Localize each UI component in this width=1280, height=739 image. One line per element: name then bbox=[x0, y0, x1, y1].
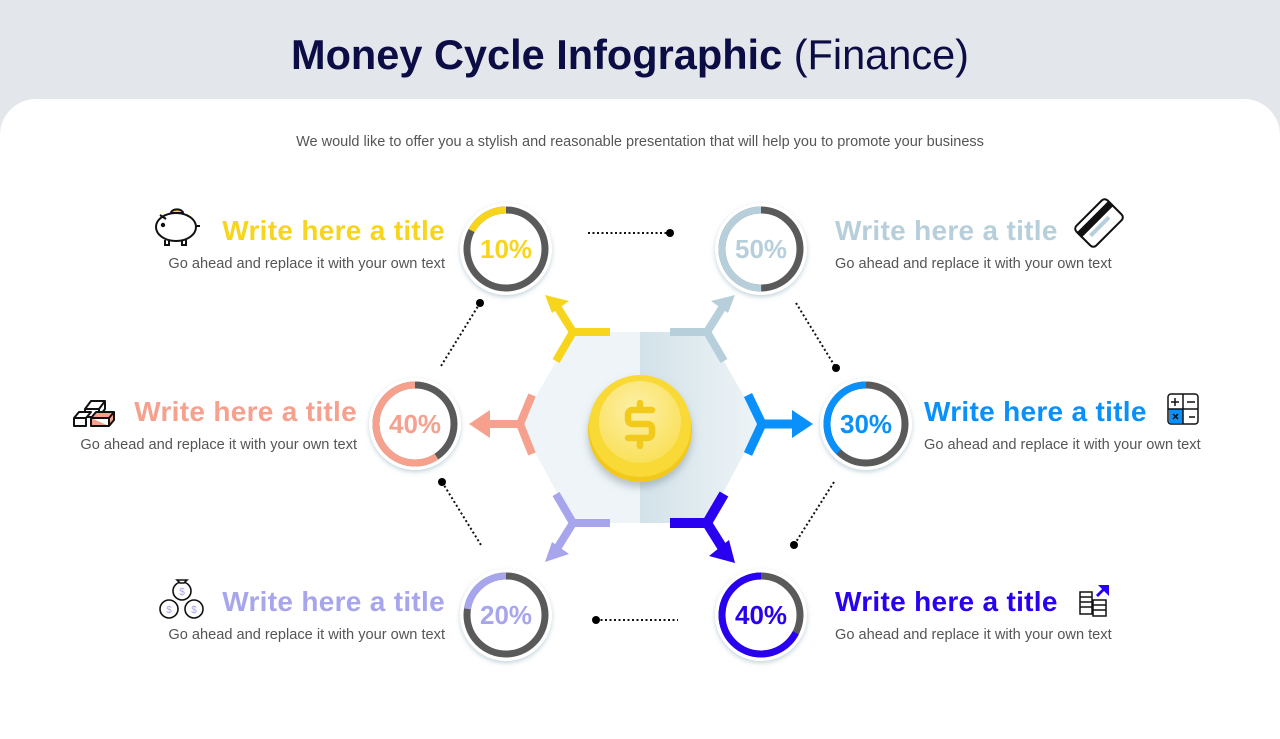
text: yellow: Go ahead and replace it with your own text bbox=[168, 256, 445, 272]
text: salmon: Write here a title bbox=[134, 396, 357, 427]
ring: 10% bbox=[460, 203, 552, 295]
icon: piggy bank bbox=[156, 209, 200, 245]
ring: 40% salmon bbox=[369, 378, 461, 470]
coin bbox=[588, 375, 692, 482]
ring: 40% salmon: 40% bbox=[389, 409, 441, 439]
text: salmon bbox=[80, 396, 357, 453]
ring: 40% dark blue bbox=[715, 569, 807, 661]
icon: card bbox=[1074, 198, 1124, 248]
ring: 30% bbox=[820, 378, 912, 470]
text: salmon: Go ahead and replace it with your own text bbox=[80, 437, 357, 453]
text: blue bbox=[924, 396, 1201, 453]
text: lavender: Go ahead and replace it with your own text bbox=[168, 627, 445, 643]
ring: 20%: 20% bbox=[480, 600, 532, 630]
text: yellow: Write here a title bbox=[222, 215, 445, 246]
dotted connectors bbox=[438, 229, 840, 624]
hexagon bbox=[520, 332, 760, 523]
text: dark blue bbox=[835, 586, 1112, 643]
text: blue: Go ahead and replace it with your own text bbox=[924, 437, 1201, 453]
arrow: salmon bbox=[469, 395, 532, 454]
text: light blue bbox=[835, 215, 1112, 272]
arrow: yellow bbox=[545, 295, 610, 361]
ring: 50% bbox=[715, 203, 807, 295]
icon: money bags: $ bbox=[166, 605, 172, 616]
arrow: lavender bbox=[545, 494, 610, 562]
ring: 40% dark blue: 40% bbox=[735, 600, 787, 630]
ring: 10%: 10% bbox=[480, 234, 532, 264]
arrow: dark blue bbox=[670, 494, 735, 563]
text: lavender: Write here a title bbox=[222, 586, 445, 617]
arrow: blue bbox=[748, 395, 813, 454]
title: Money Cycle Infographic (Finance) bbox=[291, 31, 969, 78]
icon: gold bars bbox=[74, 401, 114, 426]
icon: money bags: $ bbox=[191, 605, 197, 616]
ring: 30%: 30% bbox=[840, 409, 892, 439]
text: blue: Write here a title bbox=[924, 396, 1147, 427]
text: dark blue: Go ahead and replace it with your own text bbox=[835, 627, 1112, 643]
ring: 50%: 50% bbox=[735, 234, 787, 264]
ring: 20% bbox=[460, 569, 552, 661]
text: light blue: Write here a title bbox=[835, 215, 1058, 246]
text: lavender bbox=[168, 586, 445, 643]
text: dark blue: Write here a title bbox=[835, 586, 1058, 617]
icon: money bags bbox=[160, 580, 203, 618]
text: yellow bbox=[168, 215, 445, 272]
text: light blue: Go ahead and replace it with your own text bbox=[835, 256, 1112, 272]
icon: calculator bbox=[1168, 394, 1198, 424]
arrow: light blue bbox=[670, 295, 735, 361]
subtitle: We would like to offer you a stylish and reasonable presentation that will help you to promote your business bbox=[296, 134, 984, 150]
icon: coin stacks bbox=[1080, 585, 1109, 616]
icon: money bags: $ bbox=[179, 587, 185, 598]
